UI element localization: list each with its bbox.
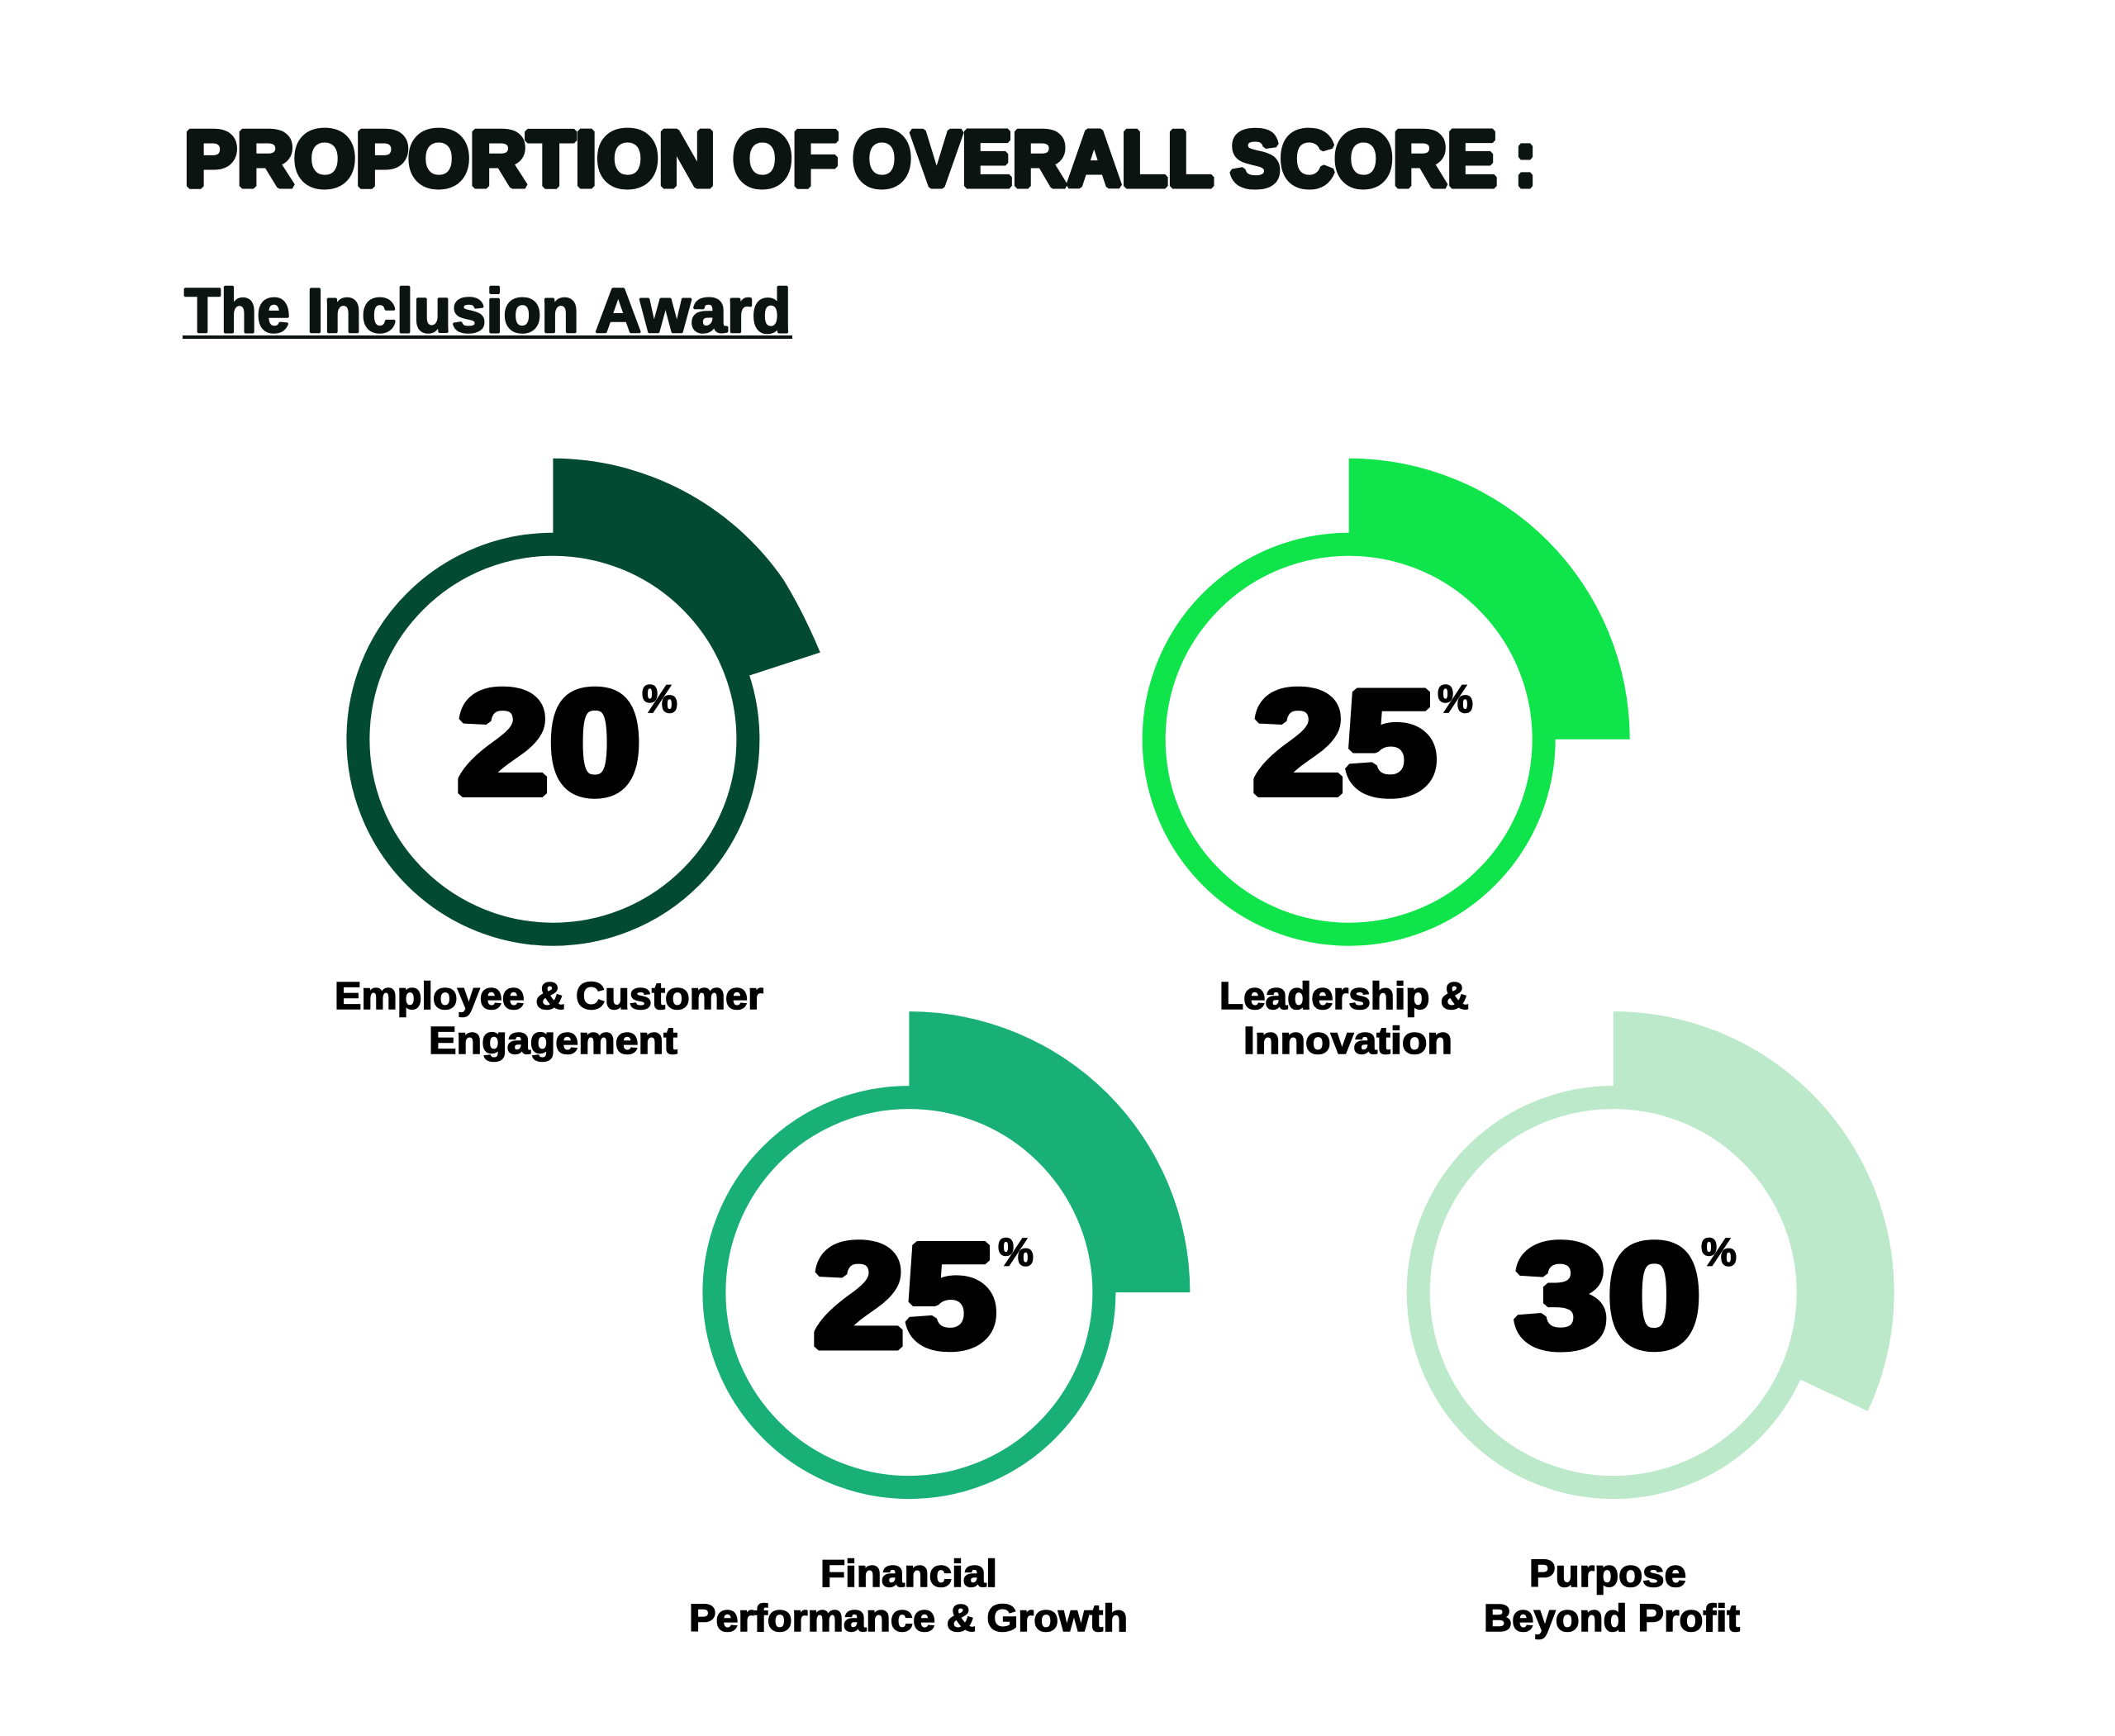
subtitle: The Inclusion Award: Inclusion [307,276,579,346]
panel: Financial Performance & Growth 25% [689,1011,1190,1639]
wedge 25% [1349,459,1630,740]
label [689,1552,1128,1639]
title [184,115,1537,203]
label: Performance & Growth [689,1596,1128,1639]
wedge 25% [909,1011,1190,1292]
title: OVERALL [853,115,1214,203]
label: Leadership & [1219,974,1469,1017]
percent sign: % [1701,1229,1737,1274]
panel: Purpose Beyond Profit 30% [1419,1011,1894,1639]
subtitle: The Inclusion Award: Award [595,276,791,346]
percent sign: % [998,1229,1034,1274]
panel: Employee & Customer Engagement 20% [335,459,820,1062]
label: Purpose [1529,1552,1686,1595]
label [1219,974,1469,1062]
label: Innovation [1243,1019,1452,1062]
percent sign: % [642,677,677,721]
title: PROPORTION [184,115,715,203]
ring [714,1097,1104,1487]
title: SCORE [1230,115,1497,203]
panel: Leadership & Innovation 25% [1154,459,1630,1062]
subtitle: The Inclusion Award: The [184,276,290,346]
label [1484,1552,1740,1639]
value 25: 25 [813,1213,996,1378]
value 30: 30 [1514,1213,1701,1378]
wedge 20% [553,459,820,679]
label [335,974,763,1062]
title: OF [733,115,839,203]
label: Beyond Profit [1484,1596,1740,1639]
value 20: 20 [457,660,641,825]
ring [1419,1097,1808,1487]
label: Engagement [429,1019,677,1062]
label: Employee & Customer [335,974,763,1017]
ring [1154,545,1544,935]
label: Financial [820,1552,997,1595]
percent sign: % [1438,677,1473,721]
title: : [1514,115,1537,203]
wedge 30% [1614,1011,1894,1411]
value 25: 25 [1252,660,1437,825]
ring [358,545,748,935]
subtitle: The Inclusion Award [183,276,792,346]
